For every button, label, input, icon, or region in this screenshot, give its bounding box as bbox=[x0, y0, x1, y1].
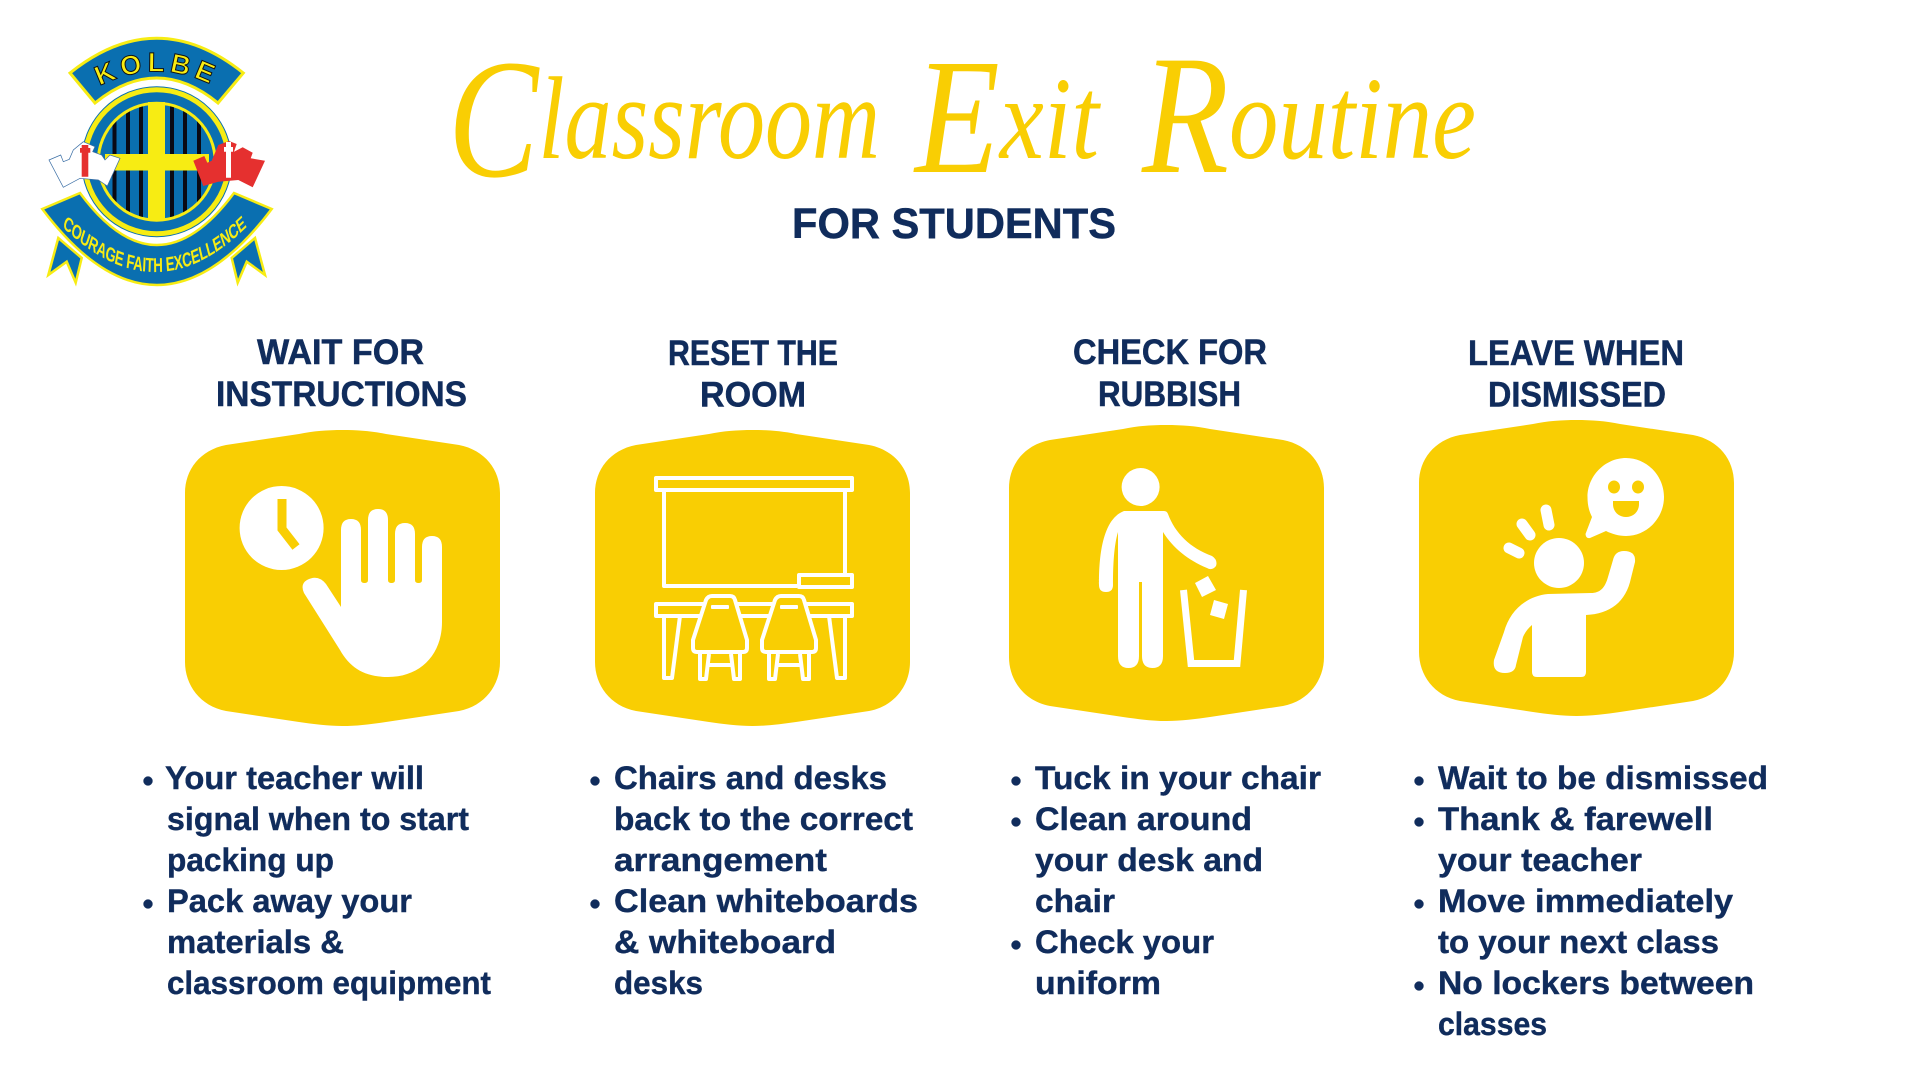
list: reset the room: Chairs and desks bbox=[614, 760, 887, 796]
list: wait for instructions: signal when to start bbox=[167, 801, 469, 837]
panel: reset the room bbox=[590, 334, 918, 1001]
logo white castle bbox=[49, 142, 120, 187]
list: wait for instructions: materials & bbox=[167, 924, 344, 960]
list: leave when dismissed: No lockers between bbox=[1438, 965, 1754, 1001]
list: wait for instructions: Your teacher will bbox=[165, 760, 424, 796]
title: C bbox=[448, 25, 540, 213]
panel: leave when dismissed bbox=[1414, 334, 1768, 1042]
title: lassroom bbox=[538, 53, 880, 184]
subtitle: FOR STUDENTS bbox=[792, 200, 1116, 248]
heading: check for rubbish: CHECK FOR bbox=[1073, 333, 1267, 372]
logo ribbon bbox=[40, 192, 274, 286]
list: check for rubbish: uniform bbox=[1035, 965, 1161, 1001]
list: check for rubbish bbox=[1012, 760, 1321, 1001]
logo: Kolbe crest bbox=[40, 36, 274, 286]
heading: wait for instructions: INSTRUCTIONS bbox=[216, 375, 467, 414]
heading: check for rubbish: RUBBISH bbox=[1098, 375, 1241, 414]
heading: leave when dismissed bbox=[1468, 334, 1684, 414]
logo central roundel bbox=[82, 87, 232, 237]
heading: leave when dismissed: DISMISSED bbox=[1488, 376, 1666, 414]
list: check for rubbish: Check your bbox=[1035, 924, 1214, 960]
logo ribbon: COURAGE FAITH EXCELLENCE bbox=[64, 216, 246, 272]
list: wait for instructions: classroom equipment bbox=[167, 965, 491, 1001]
title bbox=[448, 21, 1476, 213]
list: reset the room: back to the correct bbox=[614, 801, 913, 837]
list: reset the room: & whiteboard bbox=[614, 924, 836, 960]
list: leave when dismissed bbox=[1414, 760, 1768, 1042]
logo top banner bbox=[68, 36, 246, 106]
heading: leave when dismissed: LEAVE WHEN bbox=[1468, 334, 1684, 373]
list: leave when dismissed: to your next class bbox=[1438, 924, 1719, 960]
heading: wait for instructions: WAIT FOR bbox=[257, 333, 424, 372]
title: R bbox=[1141, 21, 1229, 209]
icon: person waving with smile bubble bbox=[1419, 420, 1734, 716]
heading: reset the room: RESET THE bbox=[668, 334, 838, 373]
list: check for rubbish: Clean around bbox=[1035, 801, 1252, 837]
title: outine bbox=[1229, 53, 1476, 184]
list: check for rubbish: chair bbox=[1035, 883, 1115, 919]
heading: check for rubbish bbox=[1073, 333, 1267, 414]
icon: whiteboard and desks bbox=[595, 430, 910, 726]
list: reset the room: arrangement bbox=[614, 842, 827, 878]
panel: wait for instructions bbox=[144, 333, 500, 1001]
heading: reset the room: ROOM bbox=[700, 376, 806, 414]
list: check for rubbish: Tuck in your chair bbox=[1035, 760, 1321, 796]
list: leave when dismissed: Wait to be dismissed bbox=[1438, 760, 1768, 796]
title: xit bbox=[998, 53, 1102, 184]
list: leave when dismissed: Thank & farewell bbox=[1438, 801, 1713, 837]
list: reset the room bbox=[590, 760, 918, 1001]
title: E bbox=[913, 25, 1000, 208]
logo red castle bbox=[193, 141, 265, 187]
list: leave when dismissed: your teacher bbox=[1438, 842, 1642, 878]
list: reset the room: desks bbox=[614, 965, 703, 1001]
list: check for rubbish: your desk and bbox=[1035, 842, 1263, 878]
list: leave when dismissed: classes bbox=[1438, 1006, 1547, 1042]
list: wait for instructions bbox=[144, 760, 491, 1001]
panel: check for rubbish bbox=[1009, 333, 1324, 1001]
icon: person using bin bbox=[1009, 425, 1324, 721]
heading: reset the room bbox=[668, 334, 838, 414]
heading: wait for instructions bbox=[216, 333, 467, 414]
list: reset the room: Clean whiteboards bbox=[614, 883, 918, 919]
list: wait for instructions: Pack away your bbox=[167, 883, 412, 919]
list: wait for instructions: packing up bbox=[167, 842, 334, 878]
icon: clock and raised hand bbox=[185, 430, 500, 726]
list: leave when dismissed: Move immediately bbox=[1438, 883, 1733, 919]
logo top banner: KOLBE bbox=[93, 52, 216, 86]
